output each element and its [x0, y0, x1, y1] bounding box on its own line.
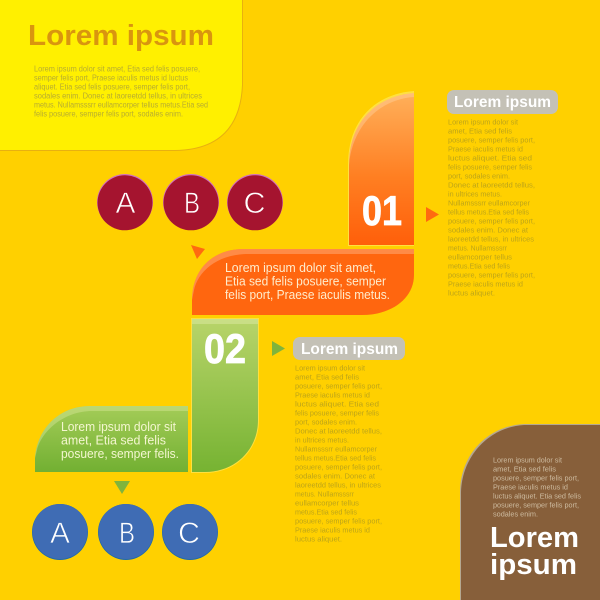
label: section 01 heading [447, 90, 558, 114]
text block: orange band copy [225, 261, 390, 302]
label: section 01 heading: Lorem ipsum [454, 94, 551, 111]
text block: section 01 body: felis posuere, semper felis [448, 162, 532, 172]
text block: section 02 body: felis posuere, semper felis [295, 408, 379, 418]
text block: brown panel body: posuere, semper felis port, [493, 474, 579, 482]
text block: section 02 body: posuere, semper felis port, [295, 462, 382, 472]
text block: section 02 body: sodales enim. Donec at [295, 472, 376, 480]
text block: section 01 body: luctus aliquet. [448, 288, 495, 298]
text block: section 01 body [448, 118, 535, 298]
text block: orange band copy: Etia sed felis posuere, semper [225, 274, 386, 288]
text block: section 02 body: Nullamsssrr eullamcorper [295, 444, 377, 454]
text block: section 02 body: posuere, semper felis port, [295, 516, 382, 526]
text block: section 01 body: posuere, semper felis port, [448, 270, 535, 280]
blue circles A B C: A [50, 517, 70, 550]
text block: section 02 body: luctus aliquet. [295, 534, 342, 544]
text block: section 01 body: Praese iaculis metus id [448, 280, 523, 288]
red circles A B C: A [116, 187, 136, 220]
text block: brown panel body: amet, Etia sed felis [493, 464, 556, 474]
text block: section 02 body: Donec at laoreetdd tellus, [295, 426, 382, 436]
blue circles A B C: C [178, 517, 200, 550]
red circles A B C: B [184, 187, 200, 220]
panel: orange text band [192, 249, 414, 315]
text block: section 02 body: in ultrices metus. [295, 436, 349, 444]
text block: section 01 body: Nullamsssrr eullamcorper [448, 198, 530, 208]
text block: brown panel body: posuere, semper felis port, [493, 500, 579, 510]
text block: section 02 body: Praese iaculis metus id [295, 526, 370, 534]
text block: panel body: aliquet. Etia sed felis posuere, semper felis port, [34, 82, 190, 92]
text block: section 02 body: Lorem ipsum dolor sit [295, 364, 366, 372]
text block: panel body: sodales enim. Donec at laoreetdd tellus, in ultrices [34, 92, 202, 100]
text block: panel body: metus. Nullamsssrr eullamcorper tellus metus.Etia sed [34, 100, 208, 110]
text block: brown panel body [493, 456, 581, 518]
text block: section 01 body: port, sodales enim. [448, 172, 510, 180]
text block: section 02 body: amet, Etia sed felis [295, 372, 359, 382]
text block: green band copy: posuere, semper felis. [61, 447, 179, 461]
panel: green text band [35, 406, 188, 472]
arrow: orange right [426, 207, 439, 222]
text block: orange band copy: Lorem ipsum dolor sit amet, [225, 261, 376, 275]
arrow: green down [114, 481, 130, 494]
text block: brown panel body: luctus aliquet. Etia sed felis [493, 492, 581, 500]
panel: bottom-right brown [460, 424, 600, 600]
text block: section 02 body: posuere, semper felis port, [295, 382, 382, 390]
panel: top-left yellow [0, 0, 243, 151]
text block: section 02 body: metus. Nullamsssrr [295, 490, 354, 498]
text block: section 01 body: sodales enim. Donec at [448, 226, 529, 234]
text block: section 01 body: Donec at laoreetdd tellus, [448, 180, 535, 190]
text block: section 01 body: posuere, semper felis port, [448, 216, 535, 226]
text block: section 02 body: metus.Etia sed felis [295, 508, 357, 516]
panel: green 02 tab [191, 318, 259, 473]
red circles A B C [97, 174, 283, 230]
text block: section 01 body: amet, Etia sed felis [448, 126, 512, 136]
label: section 02 heading [293, 337, 405, 360]
text block: panel body: Lorem ipsum dolor sit amet, Etia sed felis posuere, [34, 64, 200, 74]
text block: brown panel body: sodales enim. [493, 510, 538, 518]
heading: panel title: Lorem ipsum [28, 20, 214, 52]
blue circles A B C [32, 504, 218, 560]
text block: section 02 body [295, 364, 382, 544]
text block: green band copy: Lorem ipsum dolor sit [61, 420, 176, 434]
text block: section 02 body: eullamcorper tellus [295, 498, 359, 508]
panel: orange 01 tab [348, 91, 414, 246]
label: section 02 heading: Lorem ipsum [301, 341, 398, 358]
text block: section 01 body: Praese iaculis metus id [448, 144, 523, 154]
text block: section 01 body: laoreetdd tellus, in ultrices [448, 234, 534, 244]
text block: orange band copy: felis port, Praese iaculis metus. [225, 288, 390, 302]
text block: section 01 body: tellus metus.Etia sed felis [448, 208, 529, 216]
blue circles A B C: B [119, 517, 135, 550]
text block: section 01 body: in ultrices metus. [448, 190, 502, 198]
text block: brown panel body: Lorem ipsum dolor sit [493, 456, 563, 464]
text block: panel body: felis posuere, semper felis port, sodales enim. [34, 110, 183, 118]
text block: section 01 body: Lorem ipsum dolor sit [448, 118, 519, 126]
text block: section 02 body: laoreetdd tellus, in ultrices [295, 480, 381, 490]
text block: section 01 body: eullamcorper tellus [448, 252, 512, 262]
text block: brown panel body: Praese iaculis metus id [493, 482, 568, 492]
text block: section 02 body: luctus aliquet. Etia sed [295, 400, 379, 408]
arrow: orange pointing to red circles [191, 245, 205, 259]
number 01: 01 [362, 187, 402, 234]
text block: panel body: semper felis port, Praese iaculis metus id luctus [34, 74, 188, 82]
number 02: 02 [204, 325, 246, 372]
heading: brown panel title: Lorem [490, 522, 579, 554]
heading: brown panel title: ipsum [490, 549, 577, 581]
text block: section 02 body: Praese iaculis metus id [295, 390, 370, 400]
text block: panel body [34, 64, 208, 118]
text block: section 01 body: posuere, semper felis port, [448, 136, 535, 144]
heading: brown panel title [490, 522, 579, 581]
text block: section 01 body: metus.Etia sed felis [448, 262, 510, 270]
text block: section 02 body: port, sodales enim. [295, 418, 357, 426]
text block: section 02 body: tellus metus.Etia sed felis [295, 454, 376, 462]
text block: section 01 body: metus. Nullamsssrr [448, 244, 507, 252]
arrow: green right [272, 341, 285, 356]
text block: green band copy [61, 420, 179, 461]
text block: section 01 body: luctus aliquet. Etia sed [448, 154, 532, 162]
text block: green band copy: amet, Etia sed felis [61, 434, 166, 448]
red circles A B C: C [244, 187, 266, 220]
